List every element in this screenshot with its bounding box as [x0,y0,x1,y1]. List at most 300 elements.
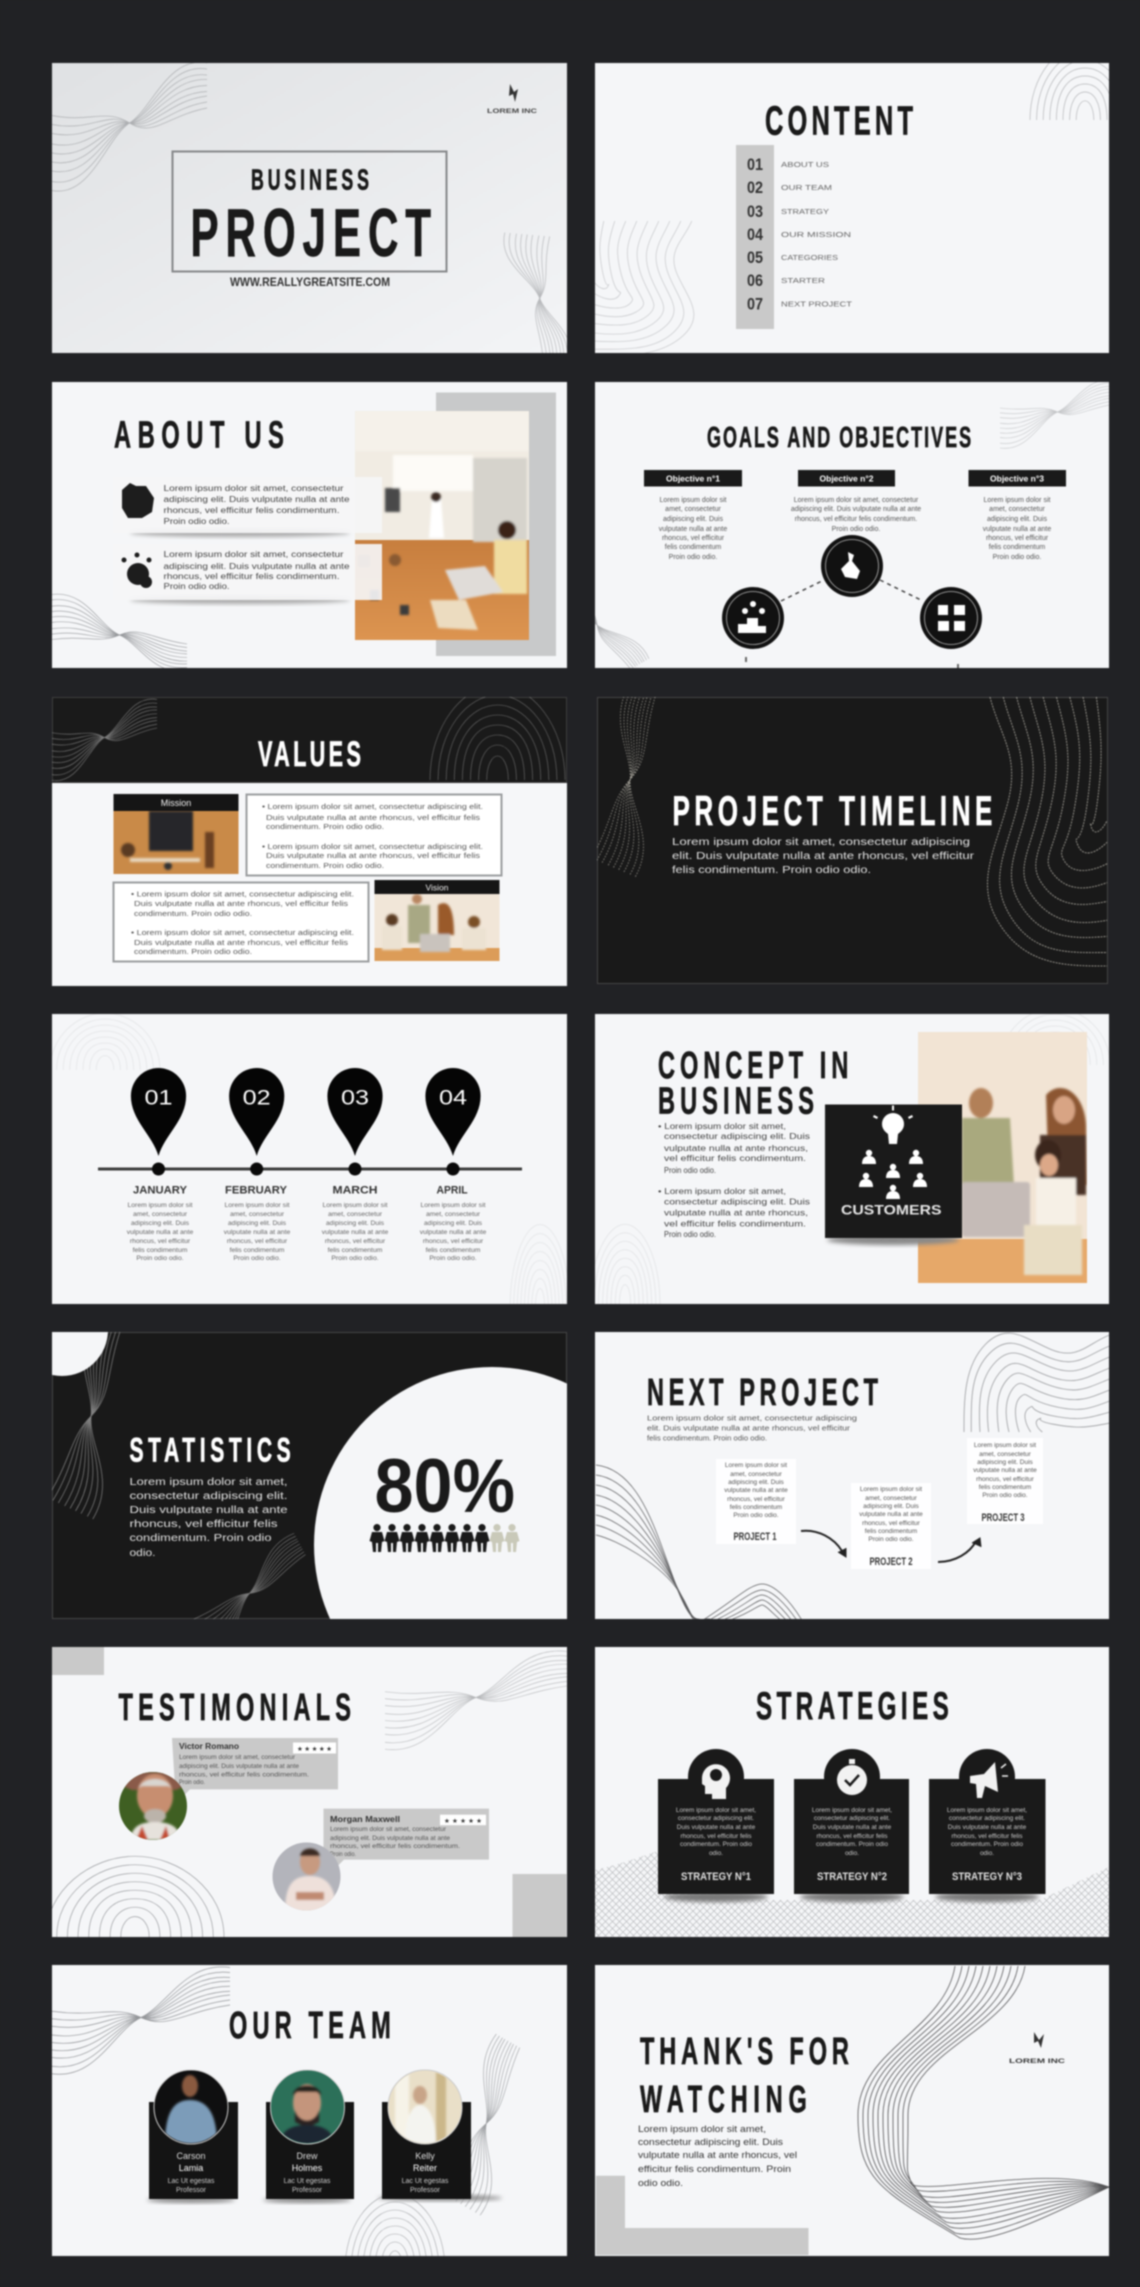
project 1: vulputate nulla at ante [724,1487,788,1494]
testimonial card 1 [172,1738,338,1803]
project 2: vulputate nulla at ante [859,1511,923,1518]
february text: Lorem ipsum dolor sit [225,1202,290,1209]
portrait: man 1 [118,1772,188,1840]
january text: vulputate nulla at ante [127,1229,193,1236]
title [640,2029,849,2120]
wave: top right [964,1333,1109,1432]
bullet text: vulputate nulla at ante rhoncus, [664,1208,808,1218]
project 2: PROJECT 2 [870,1556,912,1568]
wave: bottom lattice [595,1834,1109,1937]
project 3: Lorem ipsum dolor sit [974,1442,1036,1449]
closing text: odio odio. [638,2178,683,2189]
strategy 2: odio. [845,1850,859,1857]
testimonial card 1: Victor Romano [179,1742,239,1751]
wave: header left [52,699,157,781]
strategy 3: rhoncus, vel efficitur felis [951,1833,1023,1840]
text panel 2: Proin odio odio. [164,582,230,591]
march text: felis condimentum [328,1247,383,1254]
mission text box: condimentum. Proin odio odio. [266,824,384,831]
description: condimentum. Proin odio [130,1533,272,1544]
marker february: FEBRUARY [225,1184,288,1196]
objective 3 [968,470,1066,561]
team member 1 [147,2070,238,2203]
team member 3 [378,2070,502,2201]
logo [1009,2032,1065,2065]
strategy 3: STRATEGY N°3 [952,1871,1022,1883]
project 1: felis condimentum [730,1504,782,1511]
project 3: felis condimentum [979,1484,1031,1491]
objective 3: Objective n°3 [990,474,1044,484]
vision photo card: Vision [426,882,449,892]
icon: stopwatch [837,1765,867,1795]
project 2: Lorem ipsum dolor sit [860,1486,922,1493]
dark header [52,685,566,782]
slide 4: goals and objectives [594,381,1110,669]
project 2: amet, consectetur [865,1495,918,1502]
website: WWW.REALLYGREATSITE.COM [230,277,390,289]
strategy 3: condimentum. Proin odio [951,1841,1023,1848]
icon circle: exchange [920,587,982,649]
photo: team in room [355,411,529,640]
strategy 2: Duis vulputate nulla at ante [813,1824,892,1831]
logo: LOREM INC [487,109,538,115]
project 3: PROJECT 3 [982,1512,1024,1524]
strategy 3: odio. [980,1850,994,1857]
objective 1: Lorem ipsum dolor sit [660,497,727,504]
slide 12: strategies [595,1647,1109,1937]
objective 1: vulputate nulla at ante [659,526,727,533]
description [130,1477,288,1559]
team member 1: Lamia [179,2163,203,2173]
objective 3: adipiscing elit. Duis [987,516,1047,523]
objective 2: Objective n°2 [820,474,874,484]
vision photo card [374,880,500,961]
strategy 1: odio. [709,1850,723,1857]
customers card [825,1104,962,1245]
march text: vulputate nulla at ante [322,1229,388,1236]
project 1: PROJECT 1 [734,1531,776,1543]
wave: top right [1029,62,1110,120]
project 3 [967,1438,1043,1524]
description: Lorem ipsum dolor sit amet, [130,1477,288,1488]
mission text box [246,794,502,876]
contents list: STARTER [781,276,826,285]
team member 2: Holmes [292,2163,323,2173]
objective 2: adipiscing elit. Duis vulputate nulla at ante [791,506,921,513]
project 1: rhoncus, vel efficitur [727,1496,786,1503]
wave: bottom left [52,594,187,671]
slide 2: content [594,62,1110,354]
project 3: vulputate nulla at ante [973,1467,1037,1474]
wave: top left [52,62,207,191]
wave: bottom left [596,1465,803,1622]
january text: felis condimentum [133,1247,188,1254]
objective 1 [644,470,742,561]
objective 3: amet, consectetur [989,506,1045,513]
portrait: man 2 [272,1842,342,1912]
objective 1: rhoncus, vel efficitur [662,535,725,542]
mission text box: • Lorem ipsum dolor sit amet, consectetur adipiscing elit. [262,844,483,851]
team member 1: Lac Ut egestas [168,2178,215,2185]
wave: top right [385,1651,567,1750]
slide 5: values [52,685,567,986]
description: rhoncus, vel efficitur felis [130,1519,278,1530]
contents list: 03 [747,202,763,221]
dashed connectors [781,580,923,601]
marker april: 04 [439,1086,467,1110]
january text: Proin odio odio. [136,1255,184,1262]
testimonial card 1: rhoncus, vel efficitur felis condimentum. [179,1772,309,1778]
strategy 2: condimentum. Proin odio [816,1841,888,1848]
marker april [425,1068,481,1196]
wave: bottom left [46,1856,224,1937]
title: THANK'S FOR [640,2029,849,2072]
strategy 1: Lorem ipsum dolor sit amet, [676,1807,756,1814]
dark header: VALUES [258,736,361,774]
slide 6: project timeline [561,684,1108,984]
slide 3: about us [52,382,567,671]
wave: right [987,697,1107,966]
objective 1: Proin odio odio. [669,554,717,561]
icon: badge [122,483,154,518]
bullet text: Proin odio odio. [664,1166,716,1175]
bullet text: vel efficitur felis condimentum. [664,1154,806,1163]
bullet text: vel efficitur felis condimentum. [664,1220,806,1228]
logo [487,84,538,115]
project 2 [851,1483,931,1569]
slide 8: concept in business [590,1008,1110,1305]
icon: head [702,1764,730,1799]
contents list: 04 [747,225,763,244]
icon circle: money bag [821,535,883,597]
title box: BUSINESS [251,164,369,197]
testimonial card 2: Morgan Maxwell [330,1815,400,1824]
project 1: Lorem ipsum dolor sit [725,1462,787,1469]
corner circle [16,1284,108,1376]
description: felis condimentum. Proin odio odio. [672,865,871,876]
wave: left [15,1315,171,1519]
vision text box: • Lorem ipsum dolor sit amet, consectetur adipiscing elit. [131,892,354,898]
january text [127,1202,193,1262]
title: BUSINESS [658,1079,814,1122]
wave: right [413,2034,563,2215]
april text: vulputate nulla at ante [420,1229,486,1236]
team member 1: Professor [176,2187,207,2194]
february text: vulputate nulla at ante [224,1229,290,1236]
grey accent panel [436,392,556,656]
strategy 2: consectetur adipiscing elit. [814,1815,890,1822]
project 1: adipiscing elit. Duis [728,1479,785,1486]
strategy 3: Duis vulputate nulla at ante [948,1824,1027,1831]
february text: felis condimentum [230,1247,285,1254]
objective 1: felis condimentum [665,544,721,551]
testimonial card 2: Lorem ipsum dolor sit amet, consectetur [330,1827,446,1833]
project 3: adipiscing elit. Duis [977,1459,1034,1466]
wave: pale corners [50,1013,570,1310]
slide 10: next project [595,1332,1109,1622]
stat value: 80% [374,1444,515,1529]
march text: Proin odio odio. [331,1255,379,1262]
closing text: Lorem ipsum dolor sit amet, [638,2124,766,2135]
marker february: 02 [243,1086,271,1110]
january text: Lorem ipsum dolor sit [128,1202,193,1209]
february text: amet, consectetur [230,1211,285,1218]
january text: rhoncus, vel efficitur [130,1238,191,1245]
april text: adipiscing elit. Duis [424,1220,483,1227]
strategy 1: condimentum. Proin odio [680,1841,752,1848]
slide 1: business project cover [52,62,581,364]
team member 3: Reiter [413,2163,437,2173]
objective 2 [791,470,921,533]
strategy 2: STRATEGY N°2 [817,1871,887,1883]
intro text [647,1416,857,1442]
timeline axis [98,1168,522,1170]
contents list: 02 [747,178,763,197]
title: CONCEPT IN [658,1043,848,1086]
mission text box: Duis vulputate nulla at ante rhoncus, vel efficitur felis [266,853,481,860]
project 1: amet, consectetur [730,1471,783,1478]
contents list [747,155,853,314]
title box [172,152,446,272]
april text: Lorem ipsum dolor sit [421,1202,486,1209]
march text: Lorem ipsum dolor sit [323,1202,388,1209]
slide 9: statistics [15,1284,670,1723]
project 3: Proin odio odio. [982,1492,1028,1499]
strategy 3 [929,1749,1046,1902]
project 2: adipiscing elit. Duis [863,1503,920,1510]
march text [322,1202,388,1262]
mission text box: • Lorem ipsum dolor sit amet, consectetur adipiscing elit. [262,804,483,811]
text panel 2: adipiscing elit. Duis vulputate nulla at ante [164,562,350,571]
february text: adipiscing elit. Duis [228,1220,287,1227]
title: WATCHING [640,2077,807,2120]
team member 1: Carson [176,2151,206,2161]
project 2: Proin odio odio. [868,1536,914,1543]
april text: felis condimentum [426,1247,481,1254]
contents list: 07 [747,294,763,314]
marker march: 03 [341,1086,369,1110]
february text: Proin odio odio. [233,1255,281,1262]
slide 13: our team [52,1965,567,2270]
vision text box: Duis vulputate nulla at ante rhoncus, vel efficitur felis [134,940,349,947]
grey L shape [596,2176,808,2255]
small markers [745,657,959,668]
closing text [638,2124,797,2189]
title: ABOUT US [114,413,284,456]
text panel 1 [113,477,382,537]
strategy 1: consectetur adipiscing elit. [678,1815,754,1822]
objective 3: felis condimentum [989,544,1045,551]
contents list: 05 [747,248,763,267]
marker march [327,1068,383,1196]
closing text: consectetur adipiscing elit. Duis [638,2137,783,2148]
text panel 1: rhoncus, vel efficitur felis condimentum. [164,506,340,515]
objective 2: rhoncus, vel efficitur felis condimentum. [795,516,917,523]
march text: rhoncus, vel efficitur [325,1238,386,1245]
strategy 1: rhoncus, vel efficitur felis [680,1833,752,1840]
project 3: amet, consectetur [979,1451,1032,1458]
strategy 2: rhoncus, vel efficitur felis [816,1833,888,1840]
logo: LOREM INC [1009,2058,1065,2065]
contents list: CATEGORIES [781,253,838,262]
april text [420,1202,486,1262]
team member 3: Professor [410,2187,441,2194]
wave: header right [429,696,566,780]
big circle [314,1367,670,1723]
description: Lorem ipsum dolor sit amet, consectetur adipiscing [672,837,970,848]
marker january: 01 [144,1086,172,1110]
testimonial card 1: ★★★★★ [297,1745,332,1753]
testimonial card 2: rhoncus, vel efficitur felis condimentum. [330,1844,460,1850]
description: consectetur adipiscing elit. [130,1491,288,1502]
strategy 1: Duis vulputate nulla at ante [677,1824,756,1831]
bullet text: Proin odio odio. [664,1230,716,1239]
testimonial card 1: Lorem ipsum dolor sit amet, consectetur [179,1755,295,1761]
marker march: MARCH [332,1184,378,1196]
strategy 1 [658,1749,774,1902]
description: elit. Duis vulputate nulla at ante rhoncus, vel efficitur [672,851,975,862]
title: GOALS AND OBJECTIVES [707,422,971,454]
mission text box: condimentum. Proin odio odio. [266,863,384,870]
team member 3: Lac Ut egestas [402,2178,449,2185]
title: PROJECT TIMELINE [672,788,992,835]
project 2: felis condimentum [865,1528,917,1535]
description [672,837,975,876]
bullet text: vulputate nulla at ante rhoncus, [664,1144,808,1153]
contents list: ABOUT US [781,160,829,169]
team member 2: Lac Ut egestas [284,2178,331,2185]
slide 7: monthly timeline [50,1013,570,1310]
closing text: vulputate nulla at ante rhoncus, vel [638,2150,797,2161]
january text: amet, consectetur [133,1211,188,1218]
strategy 2 [794,1749,909,1902]
contents list: 06 [747,271,763,290]
mission photo card [114,794,238,874]
march text: adipiscing elit. Duis [326,1220,385,1227]
title: CONTENT [765,98,913,144]
bullet text: consectetur adipiscing elit. Duis [664,1132,810,1141]
contents list: NEXT PROJECT [781,300,853,308]
vision text box: Duis vulputate nulla at ante rhoncus, vel efficitur felis [134,901,349,908]
strategy 3: consectetur adipiscing elit. [949,1815,1025,1822]
april text: amet, consectetur [426,1211,481,1218]
bullet text [658,1122,810,1239]
title: STATISTICS [130,1430,291,1469]
marker february [225,1068,288,1196]
project 1: Proin odio odio. [733,1512,779,1519]
project 3: rhoncus, vel efficitur [976,1476,1035,1483]
objective 2: Lorem ipsum dolor sit amet, consectetur [794,497,919,504]
april text: rhoncus, vel efficitur [423,1238,484,1245]
testimonial card 1: Proin odio. [179,1780,205,1786]
text panel 2: Lorem ipsum dolor sit amet, consectetur [164,550,344,559]
contents list: OUR TEAM [781,183,832,192]
project 1 [716,1459,796,1544]
testimonial card 1: adipiscing elit. Duis vulputate nulla at ante [179,1764,300,1770]
intro text: felis condimentum. Proin odio odio. [647,1436,767,1442]
wave: left [595,221,694,356]
vision text box: • Lorem ipsum dolor sit amet, consectetur adipiscing elit. [131,930,354,937]
title: STRATEGIES [756,1684,949,1727]
team member 3: Kelly [415,2151,435,2161]
title: OUR TEAM [229,2003,391,2046]
grey square: top left [52,1647,104,1675]
intro text: Lorem ipsum dolor sit amet, consectetur adipiscing [647,1416,857,1422]
bullet text: • Lorem ipsum dolor sit amet, [658,1122,786,1131]
wave: left [561,684,704,877]
objective 3: rhoncus, vel efficitur [986,535,1049,542]
grey square: bottom right [512,1874,566,1937]
wave: top left [52,1967,230,2074]
text panel 2: rhoncus, vel efficitur felis condimentum. [164,572,340,581]
bullet text: • Lorem ipsum dolor sit amet, [658,1187,786,1196]
team member 2: Professor [292,2187,323,2194]
strategy 2: Lorem ipsum dolor sit amet, [812,1807,892,1814]
people pictogram [370,1524,520,1552]
title [658,1043,848,1122]
march text: amet, consectetur [328,1211,383,1218]
contents list: STRATEGY [781,207,829,216]
testimonial card 2: Proin odio. [330,1852,356,1858]
mission text box: Duis vulputate nulla at ante rhoncus, vel efficitur felis [266,815,481,822]
wave: top right [1000,380,1115,448]
vision text box: condimentum. Proin odio odio. [134,911,252,918]
marker april: APRIL [436,1184,468,1196]
icon: megaphone [970,1762,998,1798]
intro text: elit. Duis vulputate nulla at ante rhoncus, vel efficitur [647,1426,851,1432]
february text: rhoncus, vel efficitur [227,1238,288,1245]
objective 1: Objective n°1 [666,474,720,484]
january text: adipiscing elit. Duis [131,1220,190,1227]
bullet text: consectetur adipiscing elit. Duis [664,1198,810,1206]
contents list: OUR MISSION [781,230,851,239]
number strip [736,145,774,329]
icon: idea and people [859,1106,927,1199]
text panel 2 [113,544,382,604]
slide 14: thank you [595,1965,1109,2256]
strategy 1: STRATEGY N°1 [681,1871,751,1883]
photo: colleagues at laptop [918,1032,1087,1283]
title: TESTIMONIALS [118,1685,351,1728]
marker january [131,1068,188,1196]
wave: bottom [175,1533,326,1657]
wave: bottom left [594,616,650,668]
contents list: 01 [747,155,763,174]
icon circle: team chart [722,587,784,649]
title box: PROJECT [190,195,431,270]
project 2: rhoncus, vel efficitur [862,1520,921,1527]
customers card: CUSTOMERS [841,1202,942,1218]
objective 1: amet, consectetur [665,506,721,513]
closing text: efficitur felis condimentum. Proin [638,2164,791,2175]
icon: paw group [122,552,152,588]
slide 11: testimonials [46,1647,567,1937]
strategy 3: Lorem ipsum dolor sit amet, [947,1807,1027,1814]
objective 3: Lorem ipsum dolor sit [984,497,1051,504]
objective 1: adipiscing elit. Duis [663,516,723,523]
vision text box: condimentum. Proin odio odio. [134,949,252,956]
wave: pale corners [590,1008,1110,1305]
wave: bottom right [503,232,568,353]
testimonial card 2: ★★★★★ [444,1817,482,1825]
team member 2: Drew [296,2151,318,2161]
testimonial card 2: adipiscing elit. Duis vulputate nulla at ante [330,1836,451,1842]
objective 3: vulputate nulla at ante [983,526,1051,533]
arrow: project 2 to 3 [938,1538,981,1562]
marker january: JANUARY [133,1184,188,1196]
arrow: project 1 to 2 [801,1531,846,1557]
mission photo card: Mission [161,798,191,808]
